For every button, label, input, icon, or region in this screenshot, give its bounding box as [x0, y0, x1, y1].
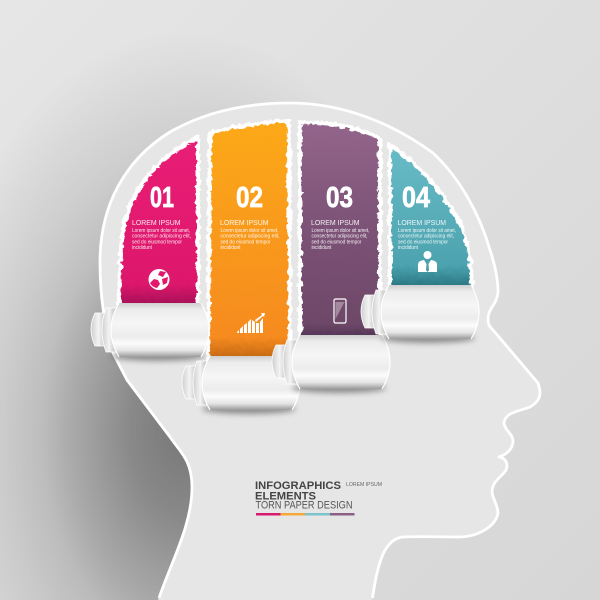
- number 04: 04: [402, 182, 430, 214]
- icon: smartphone: [334, 299, 346, 323]
- paper roll 2: [182, 356, 300, 414]
- heading 03: LOREM IPSUM: [311, 218, 360, 227]
- body text 01: Lorem ipsum dolor sit amet,: [132, 228, 190, 234]
- panel 02: orange torn window: [208, 121, 290, 360]
- title line 1: INFOGRAPHICS: [255, 480, 341, 492]
- number 03: 03: [326, 182, 353, 214]
- icon: globe: [148, 269, 170, 290]
- body text 04: consectetur adipiscing elit,: [398, 234, 454, 240]
- body text 04: sed do eiusmod tempor: [398, 239, 448, 245]
- body text 03: incididunt: [312, 245, 332, 251]
- icon: business person: [418, 251, 437, 272]
- body text 01: sed do eiusmod tempor: [132, 239, 182, 245]
- body text 01: incididunt: [132, 245, 153, 251]
- body text 04: [398, 228, 456, 251]
- panel 04: teal torn window: [390, 145, 472, 290]
- body text 01: [132, 228, 191, 251]
- head silhouette fill: [100, 103, 540, 600]
- title line 2: ELEMENTS: [255, 490, 316, 502]
- number 01: 01: [150, 182, 174, 214]
- subtitle: TORN PAPER DESIGN: [256, 500, 353, 512]
- panel 03: purple torn window: [300, 122, 380, 342]
- body text 03: [312, 228, 370, 251]
- head silhouette outline: [100, 103, 540, 598]
- heading 02: LOREM IPSUM: [220, 218, 269, 227]
- number 02: 02: [236, 182, 263, 214]
- body text 02: incididunt: [220, 245, 241, 251]
- body text 04: incididunt: [398, 245, 419, 251]
- heading 04: LOREM IPSUM: [398, 218, 446, 227]
- body text 02: Lorem ipsum dolor sit amet,: [220, 228, 278, 234]
- heading 01: LOREM IPSUM: [132, 218, 181, 227]
- body text 03: consectetur adipiscing elit,: [312, 234, 368, 240]
- body text 03: Lorem ipsum dolor sit amet,: [312, 228, 370, 234]
- paper roll 1: [91, 303, 209, 361]
- body text 02: consectetur adipiscing elit,: [220, 234, 280, 240]
- paper roll 4: [361, 285, 479, 343]
- title block: [255, 480, 382, 516]
- body text 02: sed do eiusmod tempor: [220, 239, 271, 245]
- colour legend bar: [256, 513, 354, 516]
- body text 03: sed do eiusmod tempor: [312, 239, 362, 245]
- body text 04: Lorem ipsum dolor sit amet,: [398, 228, 456, 234]
- small label: LOREM IPSUM: [346, 482, 382, 488]
- icon: growth chart: [237, 313, 265, 333]
- head shadow: [0, 20, 370, 600]
- panel 01: pink torn window: [119, 138, 198, 308]
- body text 02: [220, 228, 280, 251]
- body text 01: consectetur adipiscing elit,: [132, 234, 191, 240]
- paper roll 3: [272, 335, 390, 393]
